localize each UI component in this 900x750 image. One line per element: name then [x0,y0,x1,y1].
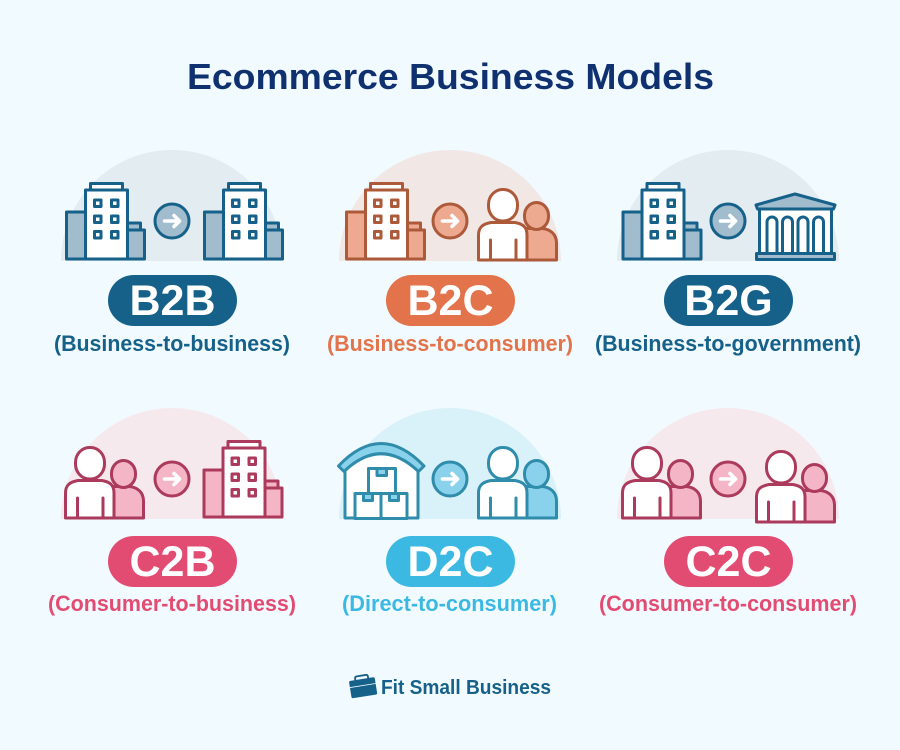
badge: C2C: C2C [685,538,772,586]
label: Business-to-government: (Business-to-government) [595,331,861,356]
logo: Fit Small Business [348,674,551,699]
icon: arrow [711,204,745,238]
badge: C2B: C2B [129,538,216,586]
wordmark: Fit Small Business [381,677,551,699]
semicircle backdrop [61,408,283,519]
badge: C2B [108,536,237,587]
icon: business building [204,184,282,259]
icon: warehouse [338,444,424,518]
icon: arrow [155,462,189,496]
panel: B2C [327,150,573,356]
icon: arrow [155,204,189,238]
icon: consumers [478,448,556,518]
label: Direct-to-consumer: (Direct-to-consumer) [342,591,557,616]
semicircle backdrop [617,150,839,261]
icon: briefcase [348,674,377,698]
semicircle backdrop [339,408,561,519]
panel: C2C [599,408,857,616]
panel: B2B [54,150,290,356]
label: Consumer-to-consumer: (Consumer-to-consumer) [599,591,857,616]
badge: B2C: B2C [407,277,494,325]
badge: D2C [386,536,515,587]
label: Consumer-to-business: (Consumer-to-business) [48,591,296,616]
label: Business-to-consumer: (Business-to-consumer) [327,331,573,356]
icon: consumers [66,448,144,518]
icon: arrow [433,462,467,496]
icon: consumers [622,448,700,518]
icon: business building [204,442,282,517]
badge: B2B: B2B [129,277,216,325]
panel: B2G [595,150,861,356]
semicircle backdrop [339,150,561,261]
badge: B2C [386,275,515,326]
semicircle backdrop [61,150,283,261]
badge: C2C [664,536,793,587]
icon: business building [346,184,424,259]
semicircle backdrop [617,408,839,519]
panel: D2C [338,408,561,616]
icon: business building [66,184,144,259]
badge: B2B [108,275,237,326]
label: Business-to-business: (Business-to-business) [54,331,290,356]
icon: consumers [756,452,834,522]
icon: business building [623,184,701,259]
icon: consumers [478,190,556,260]
badge: B2G: B2G [684,277,773,325]
icon: government building [756,194,835,260]
title: Ecommerce Business Models [187,56,714,97]
badge: D2C: D2C [407,538,494,586]
panel: C2B [48,408,296,616]
icon: arrow [711,462,745,496]
badge: B2G [664,275,793,326]
icon: arrow [433,204,467,238]
